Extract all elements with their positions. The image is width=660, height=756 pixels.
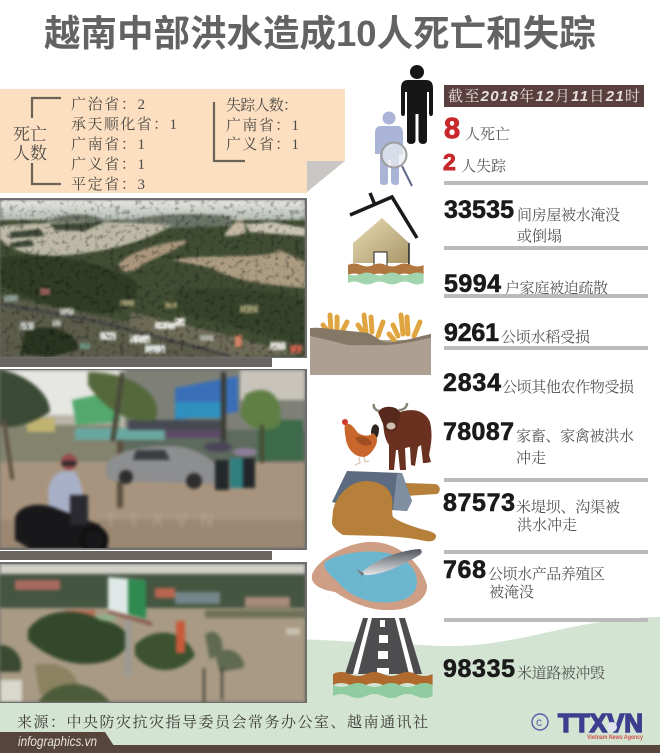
photo: flooded street with car and motorbike: TTXVN bbox=[105, 510, 213, 530]
bracket: deaths bbox=[32, 98, 61, 184]
stat: livestock: 家畜、家禽被洪水 bbox=[516, 428, 634, 445]
logo: TTXVN bbox=[532, 708, 644, 741]
list: deaths by province: 广治省：2 bbox=[71, 96, 145, 113]
logo: TTXVN: c bbox=[536, 715, 542, 729]
list: missing by province: 失踪人数： bbox=[226, 97, 298, 114]
title: 越南中部洪水造成10人死亡和失踪 bbox=[44, 13, 596, 54]
dateline bar: 截至2018年12月11日21时 bbox=[448, 87, 640, 105]
stat: aquaculture bbox=[443, 556, 605, 601]
stat: missing: 人失踪 bbox=[461, 158, 507, 175]
stat: roads: 98335 bbox=[443, 655, 515, 683]
label: deaths bbox=[13, 125, 47, 163]
list: missing by province: 广南省：1 bbox=[226, 117, 299, 134]
stat: livestock: 78087 bbox=[443, 418, 514, 446]
icon: missing person with magnifier bbox=[375, 112, 412, 186]
list: deaths by province: 广义省：1 bbox=[71, 156, 145, 173]
stat: missing bbox=[443, 149, 507, 175]
stat: dykes: 87573 bbox=[443, 489, 515, 517]
stat: livestock bbox=[443, 418, 634, 467]
stat: aquaculture: 公顷水产品养殖区 bbox=[488, 565, 605, 583]
icon: rice field bbox=[310, 315, 431, 375]
stat: houses: 间房屋被水淹没 bbox=[517, 207, 620, 224]
icon: broken dam bbox=[332, 471, 440, 541]
stat: other crops bbox=[443, 369, 634, 397]
source line: 来源：中央防灾抗灾指导委员会常务办公室、越南通讯社 bbox=[17, 713, 428, 731]
cow bbox=[374, 403, 432, 470]
chicken bbox=[342, 419, 379, 465]
stat: houses: 或倒塌 bbox=[517, 228, 562, 245]
list: deaths by province: 广南省：1 bbox=[71, 136, 145, 153]
stat: aquaculture: 被淹没 bbox=[489, 584, 534, 601]
logo: TTXVN: Vietnam News Agency bbox=[587, 735, 644, 741]
footer bar with site name: infographics.vn bbox=[18, 733, 97, 749]
list: deaths by province: 平定省：3 bbox=[71, 176, 145, 193]
caption band under photo 2 bbox=[0, 551, 272, 560]
label: deaths: 人数 bbox=[13, 144, 47, 163]
stat: dykes: 米堤坝、沟渠被 bbox=[516, 499, 620, 516]
background green landscape bbox=[0, 617, 660, 745]
stat: livestock: 冲走 bbox=[516, 450, 546, 467]
stat: rice: 9261 bbox=[444, 319, 499, 347]
list: missing by province: 广义省：1 bbox=[226, 136, 299, 153]
caption band under photo 1 bbox=[0, 358, 272, 367]
stat: houses bbox=[444, 196, 620, 245]
icon: washed-out road bbox=[333, 618, 433, 698]
stat: aquaculture: 768 bbox=[443, 556, 486, 584]
icon: chicken and cow bbox=[342, 403, 432, 470]
stat: roads: 米道路被冲毁 bbox=[517, 665, 605, 682]
label: deaths: 死亡 bbox=[13, 125, 47, 144]
stat: households: 5994 bbox=[444, 270, 501, 298]
stat: households bbox=[444, 270, 608, 298]
stat: missing: 2 bbox=[443, 149, 456, 175]
photo: flooded intersection with billboard bbox=[0, 562, 307, 703]
icon: fish pond bbox=[312, 542, 427, 610]
icon: flooded house bbox=[348, 193, 424, 284]
logo: TTXVN: TTXVN bbox=[558, 708, 643, 738]
stat: dead: 人死亡 bbox=[465, 126, 510, 143]
footer bar with site name bbox=[0, 732, 660, 753]
photo: flooded street with car and motorbike bbox=[0, 369, 307, 552]
stat: rice: 公顷水稻受损 bbox=[501, 329, 590, 346]
stat: roads bbox=[443, 655, 605, 683]
stat: dykes bbox=[443, 489, 620, 534]
stat: households: 户家庭被迫疏散 bbox=[505, 279, 608, 297]
list: deaths by province bbox=[71, 96, 177, 193]
stat: dead bbox=[444, 113, 510, 145]
list: deaths by province: 承天顺化省：1 bbox=[71, 116, 177, 133]
panel: casualties by province bbox=[0, 89, 345, 193]
stat: dead: 8 bbox=[444, 113, 460, 145]
bracket: missing bbox=[214, 102, 245, 161]
icon: black person bbox=[401, 65, 433, 144]
stat: other crops: 公顷其他农作物受损 bbox=[502, 378, 634, 396]
stat: houses: 33535 bbox=[444, 196, 514, 224]
photo: aerial view of flooded town bbox=[0, 198, 307, 358]
fish bbox=[356, 549, 422, 582]
stat: rice bbox=[444, 319, 590, 347]
stat: other crops: 2834 bbox=[443, 369, 501, 397]
stat: dykes: 洪水冲走 bbox=[517, 517, 577, 534]
list: missing by province bbox=[226, 97, 299, 153]
